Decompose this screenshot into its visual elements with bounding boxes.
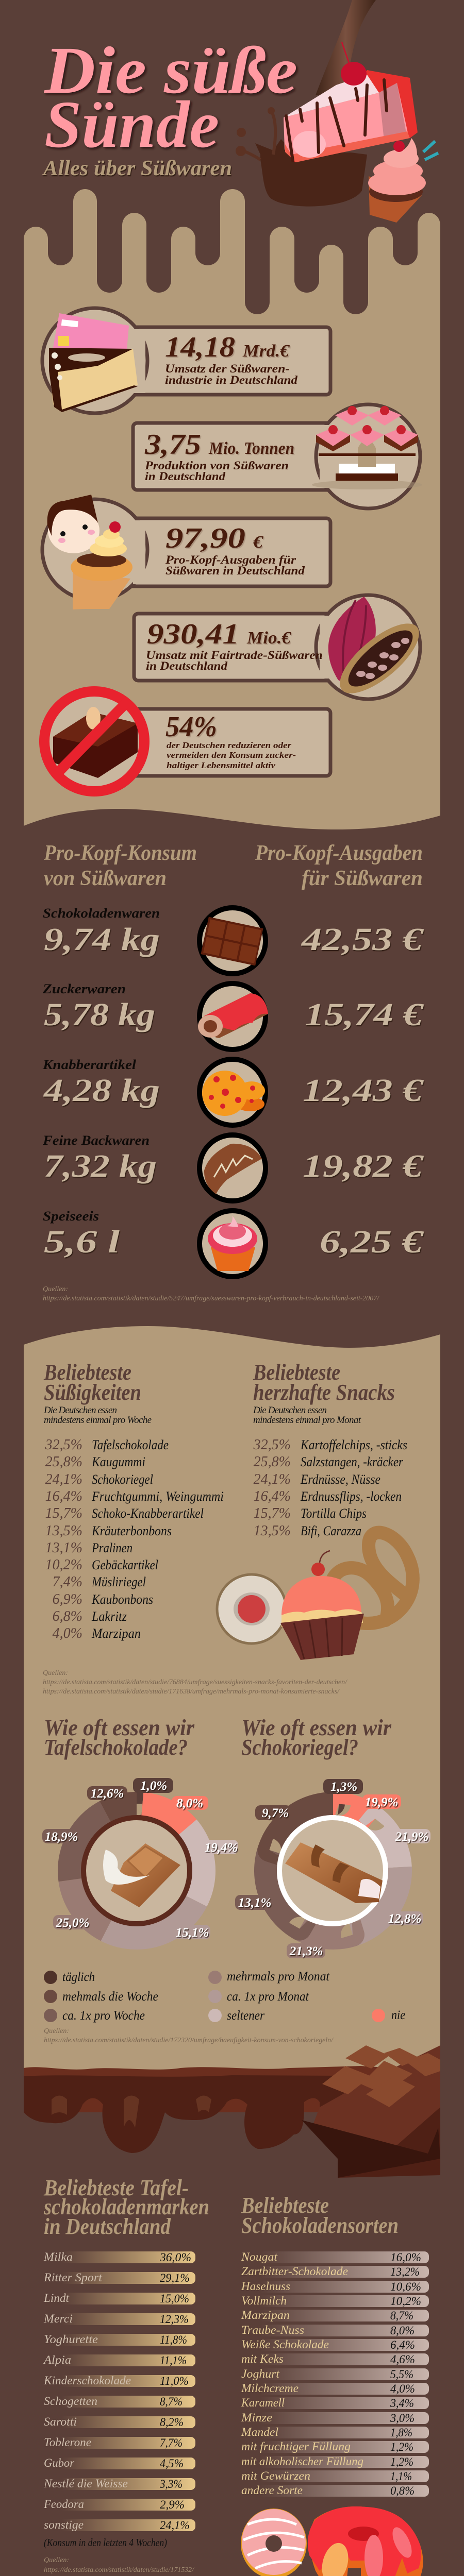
row: Knabberartikel: Knabberartikel [42, 1057, 137, 1072]
chart: brand bars: 8,2% [160, 2416, 184, 2429]
list: sweets percentages: 13,1% [45, 1540, 82, 1556]
data labels: 21,3% [289, 1944, 323, 1958]
chart: variety bars: Mandel [241, 2426, 278, 2438]
row: Zuckerwaren [42, 981, 424, 1049]
sources: consumption [43, 1285, 379, 1302]
list: sweets names: Kaubonbons [91, 1592, 153, 1607]
heading: Schokoladensorten: Beliebteste [241, 2193, 329, 2218]
list: snacks percentages: 24,1% [254, 1471, 291, 1487]
list: snacks names: Salzstangen, -kräcker [301, 1454, 404, 1469]
list: sweets names: Kräuterbonbons [91, 1523, 172, 1538]
sources: frequency: https://de.statista.com/statistik/daten/studie/172320/umfrage/haeufigkeit-konsum-von-schokoriegeln/ [44, 2037, 334, 2044]
row: Zuckerwaren: Zuckerwaren [42, 981, 126, 996]
title: Die süße [44, 33, 297, 108]
heading: Tafelschokolade frequency: Wie oft essen wir [44, 1715, 195, 1740]
row: Schokoladenwaren [43, 906, 424, 974]
value: Mrd.€ [242, 342, 290, 361]
icon: boy with cupcake [47, 495, 132, 609]
description [165, 553, 305, 577]
legend: frequency: täglich [62, 1970, 95, 1984]
chart: variety bars: mit Gewürzen [241, 2469, 310, 2482]
data labels: 19,9% [365, 1795, 398, 1809]
list: sweets names: Schokoriegel [92, 1472, 153, 1487]
illustration: melting chocolate [24, 2045, 440, 2178]
icon: swiss roll [198, 984, 268, 1049]
chart: variety bars: Haselnuss [241, 2280, 290, 2293]
row: Feine Backwaren: 19,82 € [303, 1149, 424, 1184]
heading: Pro-Kopf-Ausgaben: Pro-Kopf-Ausgaben [255, 841, 423, 865]
sources: brands: https://de.statista.com/statistik/daten/studie/171532/ [44, 2566, 194, 2574]
list: sweets percentages: 24,1% [45, 1471, 82, 1487]
sources: consumption: Quellen: [43, 1285, 68, 1293]
chart: variety bars: Vollmilch [241, 2294, 287, 2307]
chart: variety bars: mit Keks [241, 2352, 284, 2365]
value: Mio.€ [246, 629, 291, 648]
value: Mio. Tonnen [208, 439, 294, 458]
chart: brand bars: 2,9% [160, 2498, 185, 2511]
chart: brand bars: 12,3% [160, 2313, 189, 2326]
chart: variety bars: Karamell [241, 2396, 285, 2409]
chart: variety bars: 1,1% [390, 2470, 412, 2483]
panel: tan drip section with key figures [24, 189, 440, 829]
chart: variety bars: 8,7% [390, 2309, 413, 2322]
value: 97,90 [165, 522, 245, 554]
chart: brand bars [43, 2250, 195, 2532]
row: Schokoladenwaren: 9,74 kg [44, 922, 160, 957]
chart: variety bars: 5,5% [390, 2368, 413, 2381]
icon: prohibited brownie [44, 691, 145, 792]
heading: Pro-Kopf-Konsum [43, 841, 197, 890]
subheading right [253, 1405, 361, 1426]
chart: variety bars: Joghurt [241, 2367, 280, 2380]
list: snacks names: Bifi, Carazza [301, 1523, 361, 1538]
row: Feine Backwaren [42, 1133, 424, 1201]
data labels: 19,4% [205, 1841, 238, 1855]
heading: Schokoladensorten [241, 2193, 399, 2238]
chart: brand bars: 36,0% [159, 2251, 191, 2264]
value: € [253, 533, 263, 552]
data labels: 12,6% [91, 1787, 124, 1801]
chart: brand bars: Lindt [43, 2292, 70, 2304]
data labels [42, 1778, 238, 1940]
chart: variety bars: 8,0% [390, 2324, 415, 2337]
legend: frequency: mehmals die Woche [62, 1990, 158, 2004]
data labels: 21,9% [395, 1830, 428, 1844]
sources: brands: Quellen: [44, 2556, 69, 2564]
chart: brand bars: sonstige [44, 2518, 84, 2531]
list: sweets percentages: 10,2% [45, 1557, 82, 1573]
chart: brand bars: 8,7% [160, 2395, 183, 2408]
chart: brand bars: 24,1% [160, 2519, 190, 2532]
chart: Schokoriegel donut [235, 1776, 430, 1965]
heading: Pro-Kopf-Konsum: Pro-Kopf-Konsum [43, 841, 197, 865]
value: 3,75 [144, 429, 201, 461]
sources: favourites: Quellen: [43, 1669, 68, 1677]
icon: credit card and cake slice [49, 313, 138, 412]
list: sweets percentages: 6,9% [53, 1591, 82, 1607]
sources: favourites: https://de.statista.com/statistik/daten/studie/76884/umfrage/suessigkeiten-snacks-favoriten-der-deutschen/ [43, 1679, 347, 1686]
sources: frequency [44, 2027, 334, 2044]
chart: variety bars: 16,0% [390, 2251, 421, 2264]
list: sweets names: Müsliriegel [91, 1574, 146, 1589]
data labels: 25,0% [56, 1916, 89, 1930]
description: Süßwaren in Deutschland [165, 564, 305, 577]
list: sweets percentages: 16,4% [45, 1488, 82, 1504]
chart: variety bars: 1,2% [390, 2455, 413, 2468]
list: snacks percentages: 13,5% [254, 1523, 291, 1539]
description [167, 740, 296, 770]
chart: variety bars: Weiße Schokolade [241, 2338, 329, 2351]
data labels: 1,0% [140, 1779, 167, 1793]
description [144, 459, 289, 483]
legend: frequency: seltener [227, 2009, 264, 2023]
row: Speiseeis: 6,25 € [320, 1225, 424, 1260]
chart: variety bars: 10,2% [390, 2295, 421, 2308]
heading: Schokoriegel frequency: Schokoriegel? [241, 1735, 358, 1760]
chart: variety bars: mit fruchtiger Füllung [241, 2440, 351, 2453]
chart: variety bars: Zartbitter-Schokolade [241, 2265, 348, 2278]
list: sweets names [91, 1437, 224, 1641]
list: sweets names: Marzipan [91, 1626, 141, 1641]
chart: brand bars: Ritter Sport [43, 2271, 103, 2284]
chart: brand bars: Yoghurette [44, 2333, 98, 2346]
description [165, 362, 298, 386]
heading: Schokoladensorten: Schokoladensorten [241, 2213, 399, 2238]
chart: brand bars: 7,7% [160, 2436, 183, 2449]
chart: variety bars: Milchcreme [241, 2382, 299, 2395]
heading: Tafelschokolade frequency: Tafelschokolade? [44, 1735, 188, 1760]
data labels: 15,1% [176, 1926, 209, 1940]
subheading left [43, 1405, 152, 1426]
icon: chocolate bar [200, 908, 266, 974]
chart: variety bars: 3,0% [390, 2412, 415, 2425]
value [144, 429, 294, 461]
heading: Beliebteste herzhafte Snacks [253, 1360, 395, 1405]
chart: variety bars [241, 2250, 429, 2497]
subheading left: mindestens einmal pro Woche [44, 1415, 152, 1426]
stat: Fairtrade [134, 595, 429, 705]
chart: brand bars: Feodora [43, 2498, 84, 2511]
heading: Schokoriegel frequency: Wie oft essen wir [241, 1715, 392, 1740]
sources: consumption: https://de.statista.com/statistik/daten/studie/5247/umfrage/suesswaren-pro-kopf-verbrauch-in-deutschland-seit-2007/ [43, 1295, 379, 1302]
chart: variety bars: 3,4% [390, 2397, 414, 2410]
row: Schokoladenwaren: Schokoladenwaren [43, 906, 160, 921]
icon: cookies [200, 1059, 266, 1125]
chart: brand bars: Toblerone [44, 2436, 91, 2449]
chart: variety bars: 4,6% [390, 2353, 415, 2366]
icon: pastry [200, 1135, 266, 1201]
value [165, 522, 263, 554]
chart: brand bars: 11,1% [160, 2354, 187, 2367]
title [44, 33, 297, 162]
list: sweets names: Gebäckartikel [92, 1557, 158, 1572]
value: 14,18 [165, 331, 235, 363]
description: vermeiden den Konsum zucker- [167, 750, 296, 760]
stat: Pro-Kopf-Ausgaben [42, 495, 330, 609]
list: snacks names: Tortilla Chips [301, 1506, 367, 1521]
stat: 54 Prozent [44, 691, 330, 792]
legend: frequency: ca. 1x pro Monat [227, 1990, 309, 2004]
list: sweets names: Schoko-Knabberartikel [92, 1506, 204, 1521]
sources: favourites: https://de.statista.com/statistik/daten/studie/171638/umfrage/mehrmals-pro-monat-konsumierte-snacks/ [43, 1688, 340, 1696]
chart: variety bars: 1,8% [390, 2426, 412, 2439]
sources: frequency: Quellen: [44, 2027, 69, 2035]
subheading left: Die Deutschen essen [43, 1405, 117, 1416]
icon: cakes on a scale [312, 406, 422, 489]
description: Produktion von Süßwaren [144, 459, 289, 472]
icon: milk chocolate with milk splash [103, 1843, 180, 1907]
chart: brand bars: 3,3% [159, 2478, 183, 2490]
heading: Tafelschokolade frequency [44, 1715, 195, 1760]
description: haltiger Lebensmittel aktiv [167, 760, 276, 770]
heading: Tafelschokoladenmarken: Beliebteste Tafel- [43, 2175, 189, 2200]
chart: variety bars: mit alkoholischer Füllung [241, 2455, 363, 2468]
stat: Umsatz Süßwarenindustrie [42, 308, 330, 413]
description: in Deutschland [145, 470, 226, 483]
data labels: 13,1% [238, 1896, 271, 1910]
list: snacks names: Kartoffelchips, -sticks [300, 1437, 407, 1452]
sources: favourites [43, 1669, 347, 1696]
chart: brand bars: 11,8% [160, 2333, 187, 2346]
description: Umsatz mit Fairtrade-Süßwaren [146, 649, 323, 662]
chart: variety bars: Minze [241, 2411, 272, 2424]
list: sweets percentages: 7,4% [53, 1574, 82, 1590]
chart: brand bars: Kinderschokolade [43, 2374, 131, 2387]
row: Feine Backwaren: Feine Backwaren [42, 1133, 150, 1148]
chart: variety bars: andere Sorte [241, 2484, 303, 2497]
legend: frequency: mehrmals pro Monat [227, 1970, 330, 1984]
list: sweets percentages: 6,8% [53, 1608, 82, 1624]
row: Schokoladenwaren: 42,53 € [301, 922, 424, 957]
value: 54% [165, 711, 217, 743]
chart: brand bars: 4,5% [160, 2457, 184, 2470]
list: snacks names: Erdnussflips, -locken [300, 1489, 402, 1504]
subheading right: Die Deutschen essen [253, 1405, 327, 1416]
data labels: 1,3% [330, 1780, 357, 1794]
heading: Pro-Kopf-Konsum: von Süßwaren [44, 867, 167, 890]
chart: variety bars: 4,0% [390, 2382, 415, 2395]
chart: variety bars: 6,4% [390, 2338, 415, 2351]
note: consumption period: (Konsum in den letzten 4 Wochen) [44, 2536, 167, 2549]
row: Knabberartikel [42, 1057, 424, 1125]
value: 930,41 [147, 618, 239, 650]
data labels [235, 1779, 430, 1958]
list: sweets percentages: 4,0% [53, 1625, 82, 1641]
heading: Schokoriegel frequency [241, 1715, 392, 1760]
description: Umsatz der Süßwaren- [165, 362, 290, 375]
row: Speiseeis [43, 1209, 424, 1277]
heading: Tafelschokoladenmarken [43, 2175, 209, 2239]
list: sweets names: Fruchtgummi, Weingummi [91, 1489, 224, 1504]
value [165, 331, 290, 363]
chart: variety bars: Marzipan [241, 2309, 290, 2321]
list: sweets names: Tafelschokolade [92, 1437, 169, 1452]
title: Sünde [44, 88, 219, 162]
chart: brand bars: Nestlé die Weisse [43, 2477, 128, 2490]
data labels: 8,0% [176, 1797, 203, 1810]
value [147, 618, 291, 650]
heading: Tafelschokoladenmarken: in Deutschland [44, 2214, 171, 2239]
icon: cacao pods [328, 597, 429, 705]
illustration: cake with chocolate splash and cupcake [236, 0, 438, 223]
list: snacks percentages: 32,5% [253, 1437, 291, 1453]
legend: frequency [44, 1970, 405, 2023]
list: snacks percentages: 16,4% [254, 1488, 291, 1504]
chart: brand bars: Alpia [43, 2353, 71, 2366]
list: sweets percentages: 13,5% [45, 1523, 82, 1539]
list: snacks names [300, 1437, 407, 1538]
heading: Beliebteste Süßigkeiten: Süßigkeiten [44, 1380, 141, 1405]
illustration: pretzel, biscuit and cupcake [217, 1533, 413, 1660]
chart: brand bars: 11,0% [160, 2375, 189, 2387]
description [146, 649, 323, 672]
list: sweets names: Pralinen [91, 1540, 132, 1555]
stat: Produktion [133, 404, 422, 509]
heading: Pro-Kopf-Ausgaben: für Süßwaren [302, 867, 423, 890]
row: Feine Backwaren: 7,32 kg [44, 1149, 157, 1184]
list: sweets percentages: 15,7% [45, 1505, 82, 1521]
icon: ice cream cup [200, 1211, 266, 1277]
data labels: 18,9% [45, 1830, 78, 1844]
list: snacks names: Erdnüsse, Nüsse [300, 1472, 380, 1487]
data labels: 9,7% [262, 1806, 289, 1820]
description: industrie in Deutschland [165, 374, 298, 386]
chart: brand bars: Merci [43, 2312, 73, 2325]
description: Pro-Kopf-Ausgaben für [165, 553, 296, 566]
sources: brands [44, 2556, 217, 2576]
row: Speiseeis: 5,6 l [44, 1225, 120, 1260]
list: snacks percentages: 15,7% [254, 1505, 291, 1521]
row: Zuckerwaren: 15,74 € [305, 997, 424, 1032]
row: Speiseeis: Speiseeis [43, 1209, 99, 1224]
chart: brand bars: 15,0% [160, 2292, 189, 2305]
description: in Deutschland [146, 659, 228, 672]
chart: brand bars: Sarotti [44, 2415, 77, 2428]
row: Knabberartikel: 4,28 kg [43, 1073, 160, 1108]
legend: frequency: nie [391, 2008, 405, 2022]
heading: Beliebteste herzhafte Snacks: Beliebteste [253, 1360, 340, 1385]
chart: brand bars: 29,1% [160, 2272, 190, 2284]
chart: variety bars: 0,8% [390, 2484, 415, 2497]
chart: variety bars: 10,6% [390, 2280, 421, 2293]
heading: Tafelschokoladenmarken: schokoladenmarken [43, 2194, 209, 2219]
heading: Beliebteste Süßigkeiten: Beliebteste [43, 1360, 131, 1385]
subheading right: mindestens einmal pro Monat [253, 1415, 361, 1426]
panel: tan section favourites and frequency [24, 1326, 440, 2076]
list: sweets percentages: 32,5% [45, 1437, 82, 1453]
chart: variety bars: Traube-Nuss [241, 2324, 304, 2336]
description: der Deutschen reduzieren oder [167, 740, 291, 750]
chart: brand bars: Gubor [44, 2456, 75, 2469]
heading: Beliebteste herzhafte Snacks: herzhafte Snacks [253, 1380, 395, 1405]
list: sweets percentages [45, 1437, 82, 1641]
icon: chocolate bar with cream filling [285, 1842, 383, 1903]
chart: brand bars: Schogetten [44, 2395, 97, 2408]
illustration: donut and bundt cake [241, 2506, 423, 2576]
chart: variety bars: 13,2% [390, 2265, 420, 2278]
list: snacks percentages [253, 1437, 291, 1539]
chart: variety bars: Nougat [241, 2250, 278, 2263]
list: sweets names: Lakritz [91, 1609, 127, 1624]
data labels: 12,8% [388, 1912, 421, 1926]
chart: brand bars: Milka [43, 2250, 73, 2263]
row: Zuckerwaren: 5,78 kg [44, 997, 155, 1032]
chart: Tafelschokolade donut [42, 1776, 238, 1965]
subtitle: Alles über Süßwaren [42, 157, 232, 180]
list: snacks percentages: 25,8% [254, 1454, 291, 1470]
row: Knabberartikel: 12,43 € [303, 1073, 424, 1108]
legend: frequency: ca. 1x pro Woche [62, 2009, 145, 2023]
list: sweets names: Kaugummi [91, 1454, 145, 1469]
list: sweets percentages: 25,8% [45, 1454, 82, 1470]
heading: Pro-Kopf-Ausgaben [255, 841, 423, 890]
chart: variety bars: 1,2% [390, 2441, 413, 2453]
heading: Beliebteste Süßigkeiten [43, 1360, 141, 1405]
